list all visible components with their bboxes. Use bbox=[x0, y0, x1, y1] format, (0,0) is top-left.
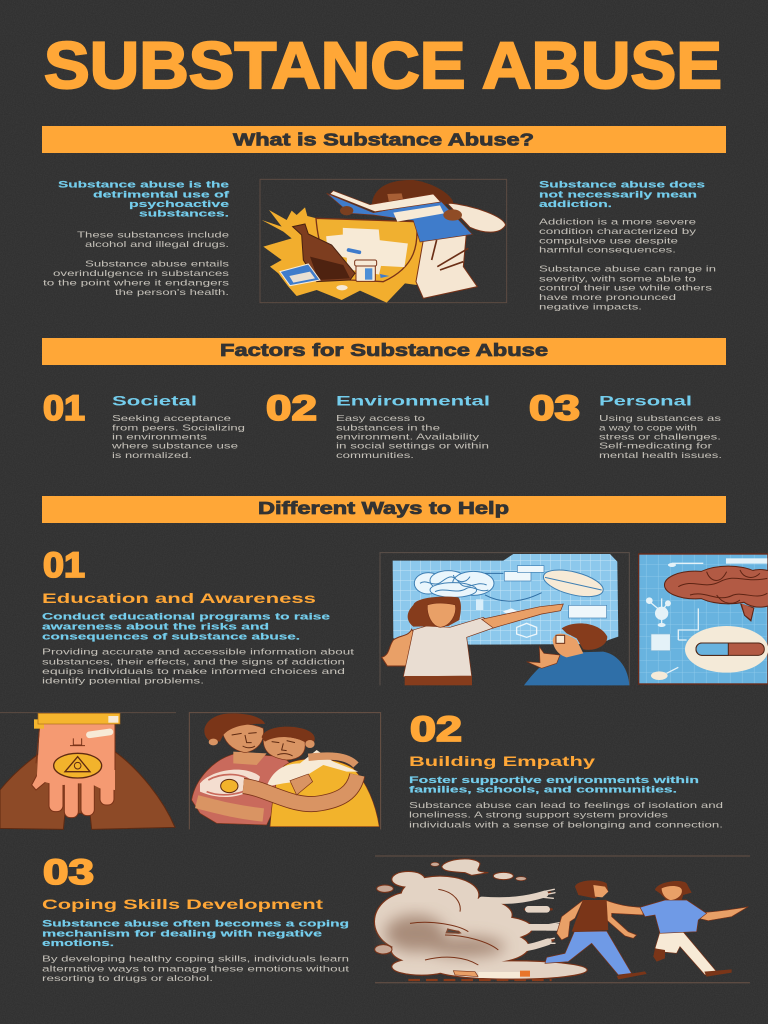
help 01: Education and Awareness: substances, their effects, and the signs of addiction bbox=[42, 656, 345, 666]
factor 03: Personal: mental health issues. bbox=[599, 450, 722, 460]
help 01: Education and Awareness: Conduct educational programs to raise bbox=[42, 612, 330, 622]
illustration: hands holding recovery coin bbox=[0, 713, 176, 829]
text block: not necessarily addiction: compulsive use despite bbox=[539, 236, 678, 246]
help 02: Building Empathy: Foster supportive environments within bbox=[409, 775, 699, 785]
text block: definition: to the point where it endangers bbox=[43, 278, 229, 288]
addiction highlight: not necessarily mean bbox=[539, 190, 697, 200]
help 03: Coping Skills Development: By developing healthy coping skills, individuals learn bbox=[42, 954, 349, 964]
help 02: Building Empathy: Building Empathy bbox=[409, 754, 596, 769]
heading band: Different Ways to Help: Different Ways to Help bbox=[258, 498, 509, 518]
factor 03: Personal: Personal bbox=[599, 394, 692, 408]
help 02: Building Empathy: families, schools, and communities. bbox=[409, 784, 677, 794]
help 02: Building Empathy bbox=[409, 710, 723, 830]
factor 01: Societal: is normalized. bbox=[112, 450, 192, 460]
help 03: Coping Skills Development bbox=[42, 853, 350, 983]
help 03: Coping Skills Development: 03 bbox=[43, 853, 94, 892]
help 03: Coping Skills Development: alternative ways to manage these emotions without bbox=[42, 964, 350, 974]
definition highlight: psychoactive bbox=[129, 199, 229, 209]
addiction highlight: Substance abuse does bbox=[539, 180, 705, 190]
illustration: presenter and man at brain screen bbox=[380, 553, 768, 685]
text block: not necessarily addiction: severity, with some able to bbox=[539, 274, 696, 284]
help 02: Building Empathy: Substance abuse can lead to feelings of isolation and bbox=[409, 800, 723, 810]
text block: not necessarily addiction: control their use while others bbox=[539, 282, 712, 292]
text block: definition: the person's health. bbox=[115, 287, 229, 297]
text block: definition: These substances include bbox=[77, 230, 229, 240]
help 03: Coping Skills Development: mechanism for dealing with negative bbox=[42, 928, 322, 938]
text block: definition: overindulgence in substances bbox=[53, 268, 229, 278]
help 01: Education and Awareness bbox=[42, 546, 355, 686]
definition highlight: detrimental use of bbox=[93, 190, 229, 200]
help 01: Education and Awareness: equips individuals to make informed choices and bbox=[42, 666, 345, 676]
factor 01: Societal: Societal bbox=[112, 394, 197, 408]
illustration: woman reading beside bottle and shield bbox=[260, 179, 507, 303]
factor 03: Personal bbox=[529, 389, 722, 460]
heading band: Factors for Substance Abuse bbox=[42, 338, 726, 365]
illustration: people walking away from smoke bbox=[375, 856, 750, 983]
definition highlight: substances. bbox=[139, 208, 229, 218]
help 01: Education and Awareness: 01 bbox=[43, 546, 85, 585]
help 03: Coping Skills Development: resorting to drugs or alcohol. bbox=[42, 973, 213, 983]
factor 02: Environmental bbox=[266, 389, 490, 460]
help 01: Education and Awareness: Providing accurate and accessible information about bbox=[42, 646, 355, 656]
help 01: Education and Awareness: identify potential problems. bbox=[42, 676, 204, 686]
factor 03: Personal: a way to cope with bbox=[599, 422, 697, 432]
factor 02: Environmental: 02 bbox=[266, 389, 317, 428]
factor 01: Societal: from peers. Socializing bbox=[112, 422, 245, 432]
text block: definition bbox=[43, 180, 229, 297]
factor 02: Environmental: Easy access to bbox=[336, 413, 425, 423]
text block: not necessarily addiction: negative impacts. bbox=[539, 302, 642, 312]
heading band: What is Substance Abuse? bbox=[42, 126, 726, 153]
help 01: Education and Awareness: awareness about the risks and bbox=[42, 622, 269, 632]
factor 02: Environmental: substances in the bbox=[336, 422, 440, 432]
text block: not necessarily addiction: condition characterized by bbox=[539, 226, 697, 236]
factor 02: Environmental: Environmental bbox=[336, 394, 490, 408]
text block: definition: Substance abuse entails bbox=[85, 258, 229, 268]
help 03: Coping Skills Development: Substance abuse often becomes a coping bbox=[42, 918, 349, 928]
addiction highlight: addiction. bbox=[539, 199, 612, 209]
factor 01: Societal: Seeking acceptance bbox=[112, 413, 231, 423]
text block: not necessarily addiction: harmful consequences. bbox=[539, 244, 676, 254]
factor 01: Societal: where substance use bbox=[110, 440, 238, 450]
help 01: Education and Awareness: Education and Awareness bbox=[42, 591, 316, 606]
factor 01: Societal: 01 bbox=[43, 389, 85, 428]
help 02: Building Empathy: individuals with a sense of belonging and connection. bbox=[409, 820, 723, 830]
factor 03: Personal: stress or challenges. bbox=[599, 432, 721, 442]
addiction highlight bbox=[539, 180, 705, 209]
factor 01: Societal: in environments bbox=[112, 432, 207, 442]
factor 03: Personal: Using substances as bbox=[599, 413, 721, 423]
definition highlight bbox=[58, 180, 229, 218]
text block: not necessarily addiction: have more pronounced bbox=[539, 292, 676, 302]
text block: not necessarily addiction bbox=[539, 180, 716, 312]
text block: definition: alcohol and illegal drugs. bbox=[85, 239, 229, 249]
illustration: two men embracing with coin bbox=[189, 713, 381, 829]
factor 02: Environmental: communities. bbox=[336, 450, 414, 460]
factor 02: Environmental: in social settings or within bbox=[336, 440, 489, 450]
help 02: Building Empathy: 02 bbox=[410, 710, 462, 749]
help 03: Coping Skills Development: Coping Skills Development bbox=[42, 897, 324, 912]
factor 01: Societal bbox=[43, 389, 245, 460]
text block: not necessarily addiction: Addiction is a more severe bbox=[539, 216, 696, 226]
title: SUBSTANCE ABUSE bbox=[44, 28, 722, 102]
heading band: What is Substance Abuse?: What is Substance Abuse? bbox=[233, 130, 534, 150]
definition highlight: Substance abuse is the bbox=[58, 180, 229, 190]
factor 02: Environmental: environment. Availability bbox=[336, 432, 480, 442]
help 01: Education and Awareness: consequences of substance abuse. bbox=[42, 632, 300, 642]
help 03: Coping Skills Development: emotions. bbox=[42, 938, 114, 948]
factor 03: Personal: Self-medicating for bbox=[599, 440, 712, 450]
heading band: Factors for Substance Abuse: Factors for Substance Abuse bbox=[220, 340, 548, 360]
heading band: Different Ways to Help bbox=[42, 496, 726, 523]
help 02: Building Empathy: loneliness. A strong support system provides bbox=[409, 810, 668, 820]
text block: not necessarily addiction: Substance abuse can range in bbox=[539, 264, 716, 274]
factor 03: Personal: 03 bbox=[529, 389, 580, 428]
